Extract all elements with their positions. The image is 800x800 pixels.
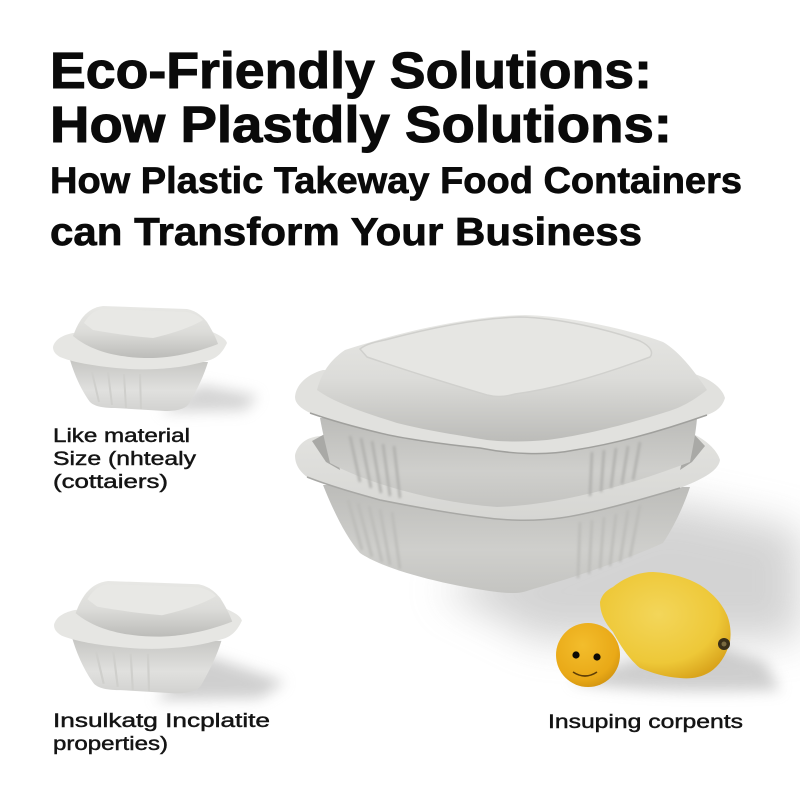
ribs on upper container	[350, 436, 640, 498]
upper container lid	[295, 315, 725, 454]
small container, bottom left	[54, 581, 285, 700]
title: can Transform Your Business	[50, 211, 642, 254]
large stacked containers	[295, 315, 725, 593]
title: How Plastdly Solutions:	[50, 96, 672, 153]
lemon and smiling ball	[556, 572, 780, 691]
title: How Plastic Takeway Food Containers	[50, 160, 742, 201]
floor shadow of large containers	[440, 500, 800, 640]
label: insulating components: Insuping corpents	[548, 712, 743, 733]
label: material and size	[53, 426, 197, 493]
label: insulating properties	[53, 711, 270, 755]
upper container body	[320, 418, 697, 507]
label: material and size: Like material	[53, 426, 190, 447]
label: material and size: (cottaiers)	[53, 472, 168, 493]
small container, top left	[53, 306, 258, 412]
label: insulating properties: Insulkatg Incplatite	[53, 711, 270, 732]
title	[50, 42, 742, 254]
label: insulating properties: properties)	[53, 734, 168, 755]
label: material and size: Size (nhtealy	[53, 449, 197, 470]
icon: smiley ball	[556, 623, 620, 687]
lower container	[295, 430, 720, 593]
icon: lemon	[600, 572, 731, 678]
title: Eco-Friendly Solutions:	[50, 42, 652, 99]
